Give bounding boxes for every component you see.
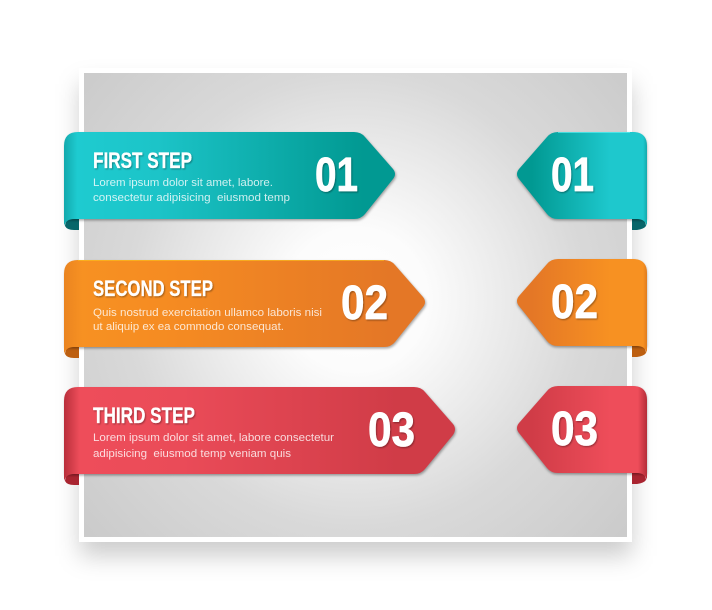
number: 02: 02 [341,277,388,330]
heading: third step: THIRD STEP [93,403,195,428]
fold: second step [65,346,79,358]
text: third step description: adipisicing eiusmod temp veniam quis [93,448,291,460]
text: second step description: Quis nostrud exercitation ullamco laboris nisi [93,307,322,319]
tag: right 03 [517,386,647,484]
frame shadow [80,84,632,556]
heading: second step: SECOND STEP [93,276,213,301]
number: 03: 03 [368,404,415,457]
text: second step description: ut aliquip ex ea commodo consequat. [93,321,284,333]
number: right 02: 02 [551,276,598,329]
text: first step description: consectetur adipisicing eiusmod temp [93,192,290,204]
heading: first step: FIRST STEP [93,148,192,173]
tag: right 02 [517,259,647,357]
text: third step description: Lorem ipsum dolor sit amet, labore consectetur [93,432,334,444]
number: right 01: 01 [551,149,594,202]
fold: right 03 [632,472,646,484]
number: right 03: 03 [551,403,598,456]
fold: third step [65,473,79,485]
ribbon: first step [64,132,396,230]
ribbon: second step [64,260,426,358]
panel: white frame with grey radial background [82,70,630,540]
text: first step description: Lorem ipsum dolor sit amet, labore. [93,177,273,189]
fold: right 01 [632,218,646,230]
tag: right 01 [517,132,647,230]
fold: right 02 [632,345,646,357]
fold: first step [65,218,79,230]
number: 01: 01 [315,149,358,202]
ribbon: third step [64,387,456,485]
